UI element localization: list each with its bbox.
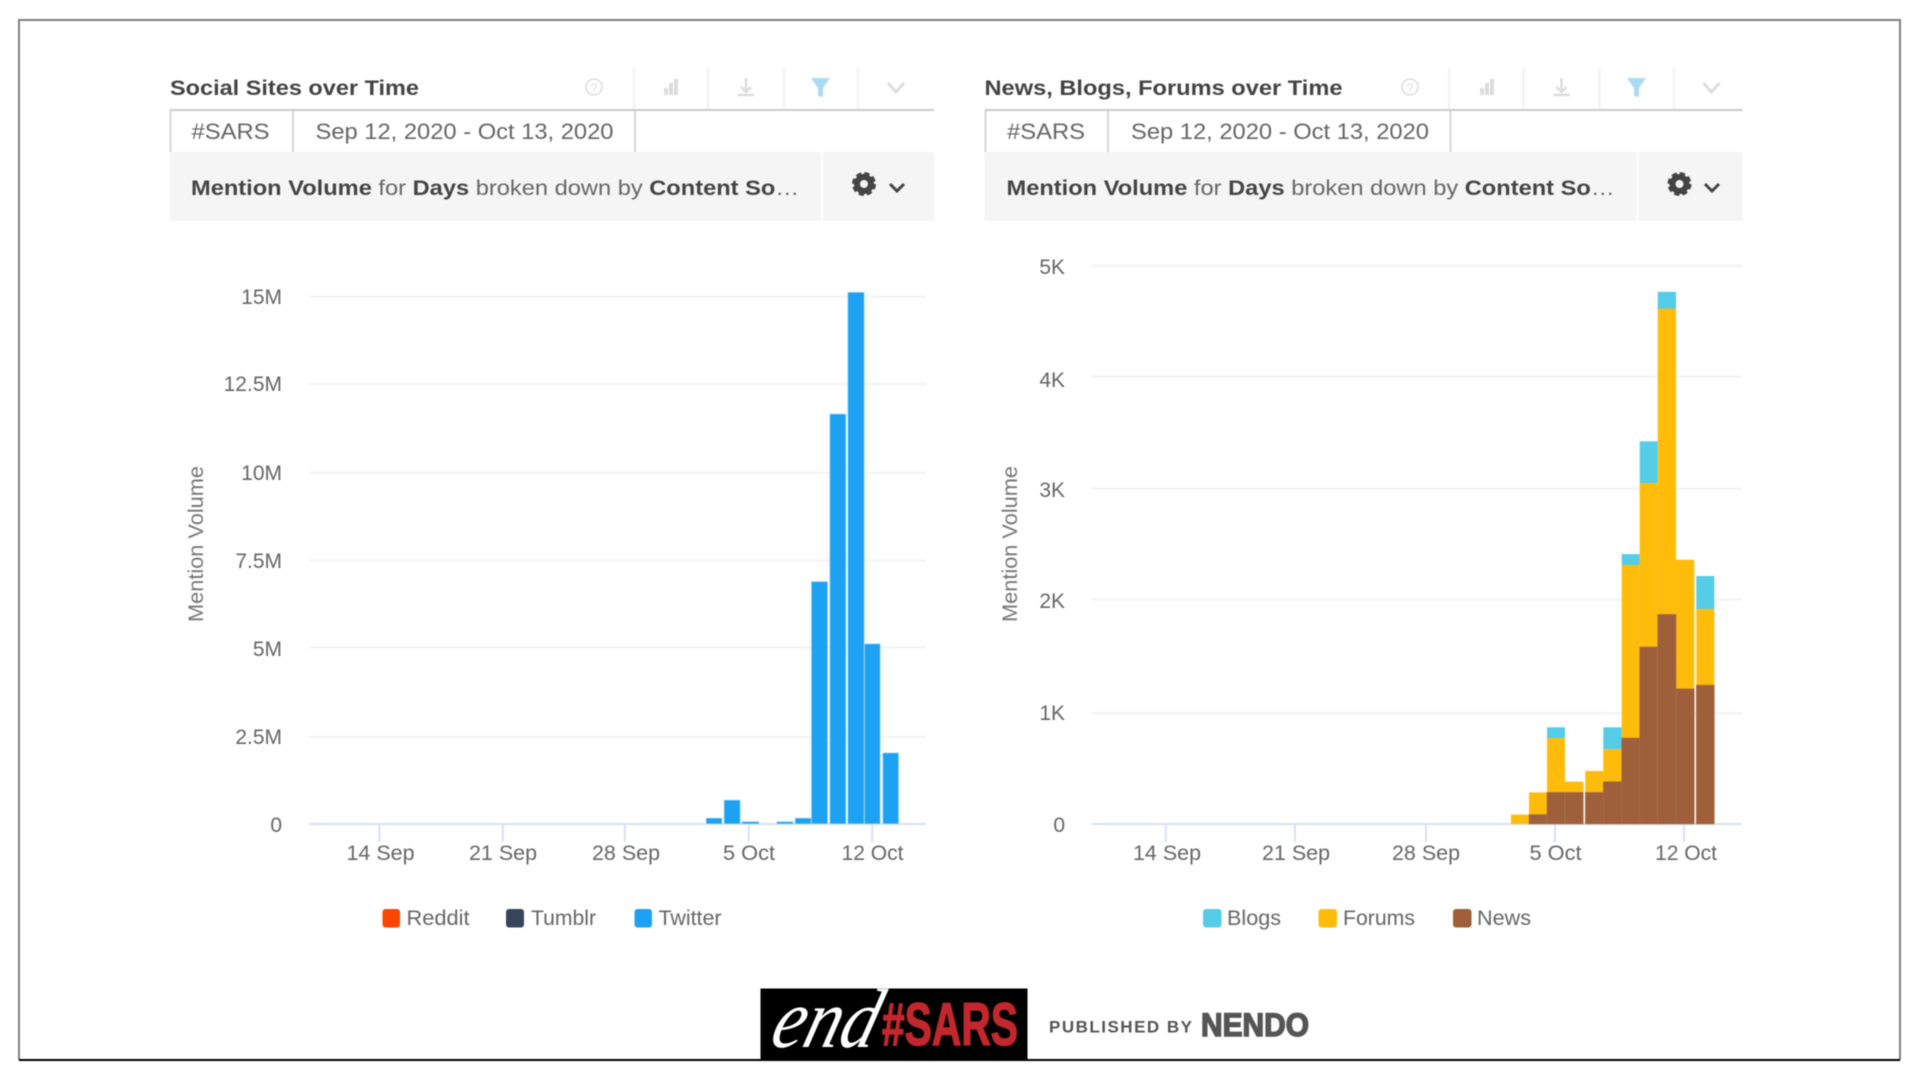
y axis: mention volume: 15M (241, 286, 282, 309)
x axis: dates: 21 Sep (469, 842, 537, 865)
footer credit: published by nendo: PUBLISHED BY (1049, 1018, 1193, 1036)
x axis: dates: 5 Oct (1530, 842, 1582, 865)
filter tabs: Sep 12, 2020 - Oct 13, 2020 (316, 119, 614, 144)
bar chart: twitter mentions by day (706, 292, 899, 824)
x axis: dates: 21 Sep (1262, 842, 1330, 865)
y axis: mention volume: 12.5M (224, 373, 282, 396)
y axis: mention volume: 2.5M (235, 726, 282, 749)
y axis: mention volume: 0 (270, 814, 282, 837)
y axis: mention volume: 5K (1039, 256, 1065, 279)
footer credit: published by nendo: NENDO (1201, 1007, 1309, 1043)
filter tabs: #SARS (192, 119, 270, 144)
stacked bar chart: blogs, forums, news by day (1511, 292, 1714, 824)
toolbar icons (1402, 68, 1720, 110)
y axis: mention volume: 10M (241, 462, 282, 485)
blogs segments (1547, 292, 1714, 749)
filter tabs: Sep 12, 2020 - Oct 13, 2020 (1131, 119, 1429, 144)
footer logo: end#SARS: end (763, 973, 894, 1066)
legend: Forums (1343, 907, 1415, 930)
y axis: mention volume: 4K (1039, 369, 1065, 392)
filter tabs: #SARS (1007, 119, 1085, 144)
y axis: mention volume: 1K (1039, 702, 1065, 725)
filter tabs (986, 110, 1450, 152)
legend (382, 907, 722, 930)
x axis: dates: 28 Sep (592, 842, 660, 865)
news segments (1529, 614, 1714, 824)
toolbar icons: ? (591, 81, 598, 95)
x axis: dates: 14 Sep (346, 842, 414, 865)
x axis: dates: 14 Sep (1133, 842, 1201, 865)
panel: social sites over time (170, 68, 934, 930)
y axis: mention volume: Mention Volume (185, 466, 208, 622)
y axis: mention volume: 0 (1053, 814, 1065, 837)
panel heading: Social Sites over Time (170, 77, 419, 100)
legend: Twitter (658, 907, 722, 930)
panel heading: News, Blogs, Forums over Time (984, 77, 1342, 100)
y axis: mention volume: 7.5M (235, 550, 282, 573)
y axis: mention volume (185, 286, 926, 837)
legend: Reddit (406, 907, 470, 930)
footer logo: end#SARS (760, 973, 1028, 1066)
x axis: dates (309, 824, 926, 865)
y axis: mention volume: 2K (1039, 590, 1065, 613)
toolbar icons (586, 68, 904, 110)
footer credit: published by nendo (1049, 1007, 1309, 1043)
filter tabs (170, 110, 635, 152)
legend: Tumblr (531, 907, 596, 930)
x axis: dates: 5 Oct (723, 842, 775, 865)
chart description bar: Mention Volume for Days broken down by Content So … (1006, 177, 1614, 200)
y axis: mention volume: 5M (253, 638, 282, 661)
x axis: dates (1092, 824, 1741, 865)
x axis: dates: 12 Oct (842, 842, 904, 865)
chart description bar: Mention Volume for Days broken down by Content So … (191, 177, 799, 200)
y axis: mention volume: 3K (1039, 479, 1065, 502)
forums segments (1511, 308, 1714, 824)
legend: Blogs (1227, 907, 1281, 930)
x axis: dates: 28 Sep (1392, 842, 1460, 865)
chart description bar (984, 152, 1742, 221)
legend (1203, 907, 1531, 930)
chart description bar (170, 152, 934, 221)
panel: news, blogs, forums over time (984, 68, 1742, 930)
y axis: mention volume: Mention Volume (999, 466, 1022, 622)
toolbar icons: ? (1407, 81, 1414, 95)
y axis: mention volume (999, 256, 1742, 837)
footer logo: end#SARS: #SARS (882, 991, 1018, 1058)
x axis: dates: 12 Oct (1655, 842, 1717, 865)
legend: News (1477, 907, 1531, 930)
